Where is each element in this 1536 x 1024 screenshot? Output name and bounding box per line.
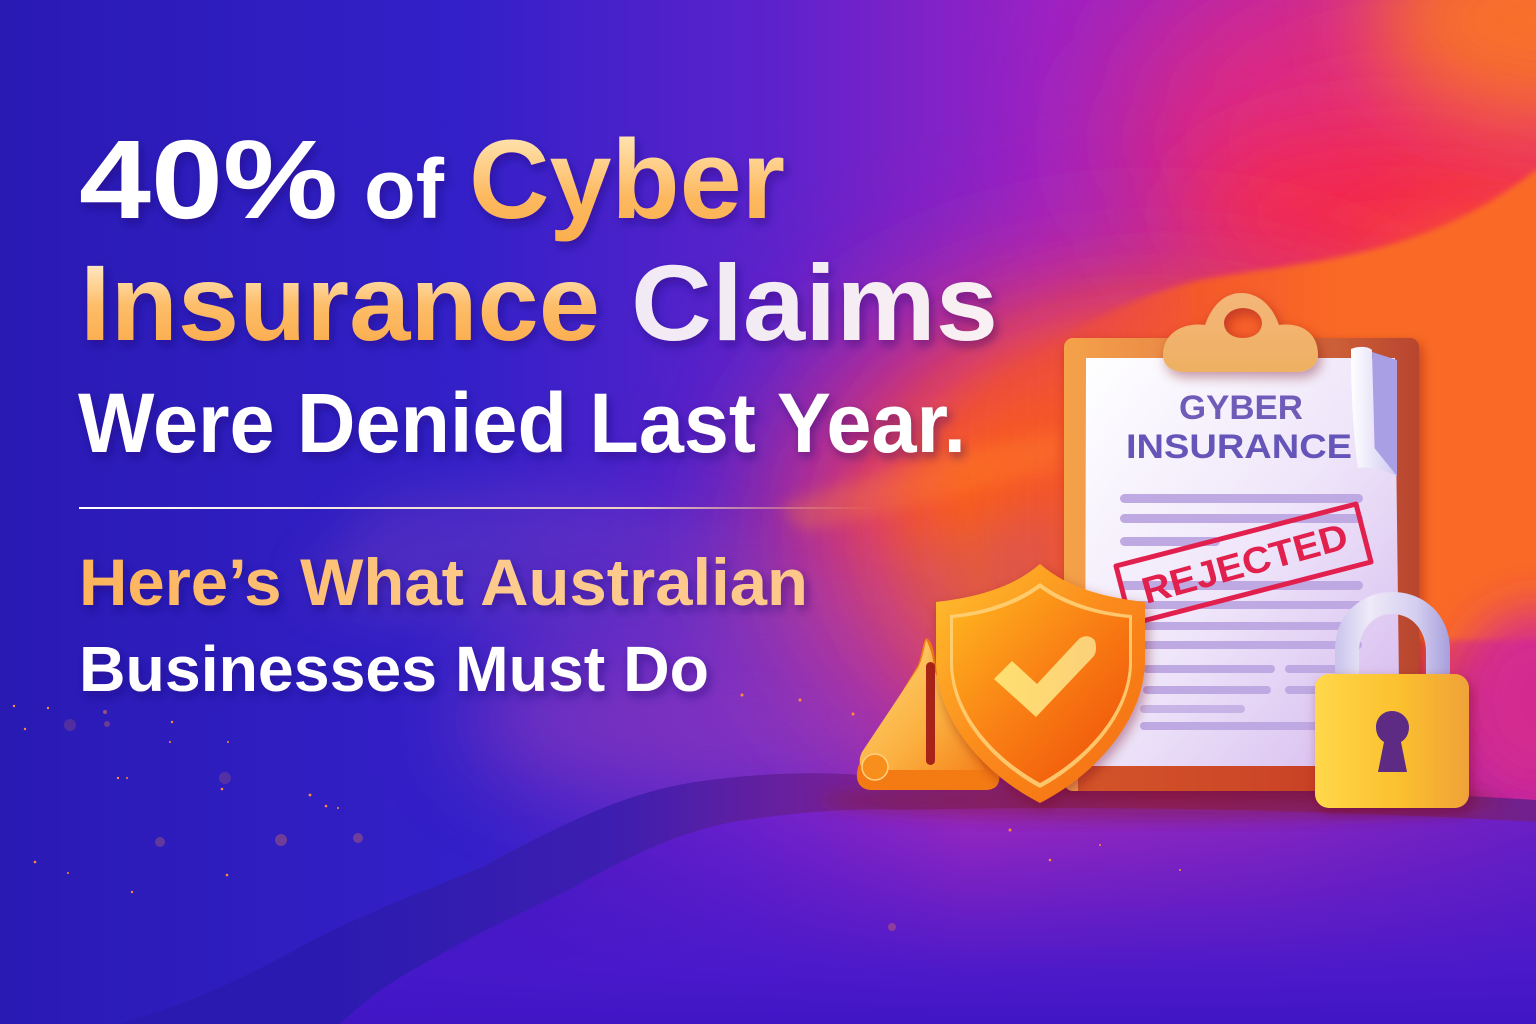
clipboard clip	[1163, 293, 1318, 372]
document title	[1126, 389, 1352, 466]
background: dark wave band	[120, 773, 1536, 1024]
padlock shackle	[1335, 592, 1450, 680]
headline line 2: Claims	[631, 242, 998, 363]
headline line 1	[79, 117, 785, 242]
background: orange particles	[13, 694, 1181, 931]
rejected stamp	[1116, 504, 1371, 624]
headline line 1: 40%	[79, 117, 338, 242]
headline line 2: Insurance	[80, 242, 600, 363]
clipboard paper	[1085, 358, 1400, 766]
illustration: ground shadow	[820, 780, 1500, 820]
headline	[78, 117, 998, 470]
subheadline line 2: Businesses Must Do	[79, 633, 709, 705]
background: front purple hill	[340, 808, 1536, 1024]
headline line 2	[80, 242, 998, 363]
warning triangle icon	[857, 638, 999, 790]
rejected stamp: REJECTED	[1137, 516, 1352, 612]
page curl	[1351, 347, 1397, 476]
document title: INSURANCE	[1126, 428, 1352, 466]
headline line 3: Were Denied Last Year.	[78, 376, 966, 470]
padlock body	[1315, 674, 1469, 808]
subheadline line 1: Here’s What Australian	[79, 545, 808, 619]
keyhole	[1376, 711, 1409, 772]
headline line 1: Cyber	[469, 117, 785, 242]
headline line 1: of	[364, 142, 445, 236]
padlock icon	[1315, 592, 1469, 808]
clipboard	[1064, 293, 1419, 791]
shield body	[936, 564, 1145, 803]
document title: GYBER	[1179, 389, 1303, 427]
check mark	[994, 636, 1096, 717]
shield with check icon	[936, 564, 1145, 803]
subheadline	[79, 545, 808, 705]
clipboard board	[1064, 338, 1419, 791]
document text lines	[1120, 494, 1363, 730]
divider rule	[79, 507, 879, 509]
